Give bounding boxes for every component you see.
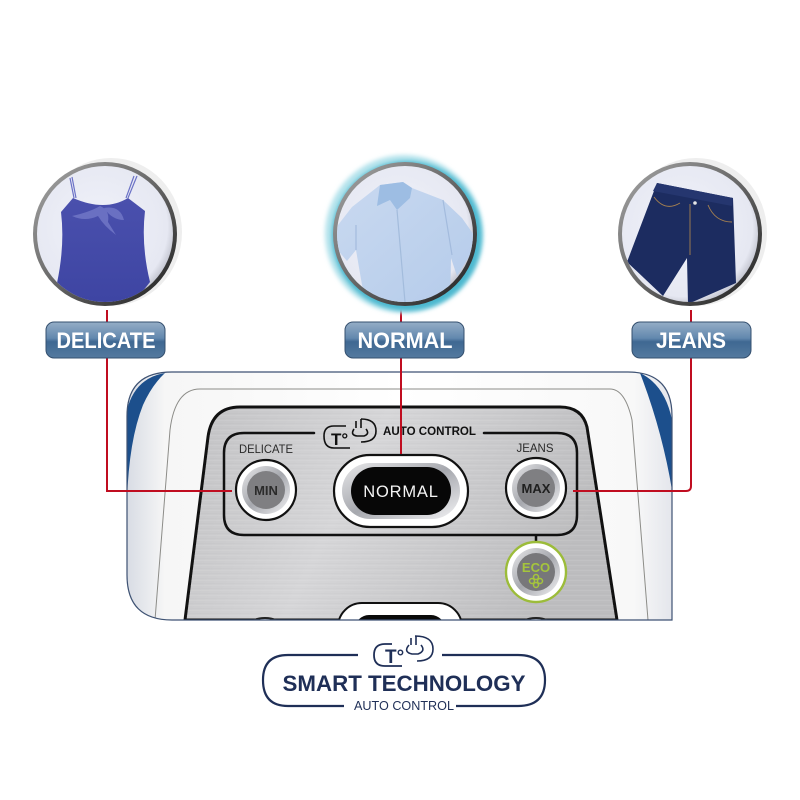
auto control frame [224,433,577,535]
auto control heading: AUTO CONTROL [383,426,476,438]
delicate label on panel: DELICATE [239,442,293,456]
MAX button [506,458,566,518]
control panel device [128,373,672,620]
label: JEANS: JEANS [656,328,726,353]
garment: delicate top [33,158,182,310]
NORMAL button: NORMAL [363,483,439,501]
auto control heading [324,419,476,449]
logo: smart technology auto control [263,636,545,713]
label: NORMAL: NORMAL [358,328,452,353]
steel panel [185,407,617,620]
connector lines [107,308,691,491]
MIN button [236,460,296,520]
small lower buttons [254,602,547,620]
MAX button: MAX [522,481,551,496]
logo: smart technology auto control: T° [385,647,404,668]
logo: smart technology auto control: AUTO CONTROL [354,699,454,713]
ECO button: ECO [522,560,550,575]
garment: jeans [618,158,767,306]
MIN button: MIN [254,483,278,498]
label: DELICATE: DELICATE [56,328,156,353]
label: NORMAL [345,322,464,358]
label: JEANS [632,322,751,358]
NORMAL button [334,455,468,527]
device outline [127,372,672,620]
auto control heading: T° [331,430,348,449]
logo: smart technology auto control: SMART TECHNOLOGY [282,671,526,696]
jeans label on panel: JEANS [516,441,554,455]
garment: normal shirt [325,155,483,313]
label: DELICATE [46,322,165,358]
ECO button [506,542,566,602]
